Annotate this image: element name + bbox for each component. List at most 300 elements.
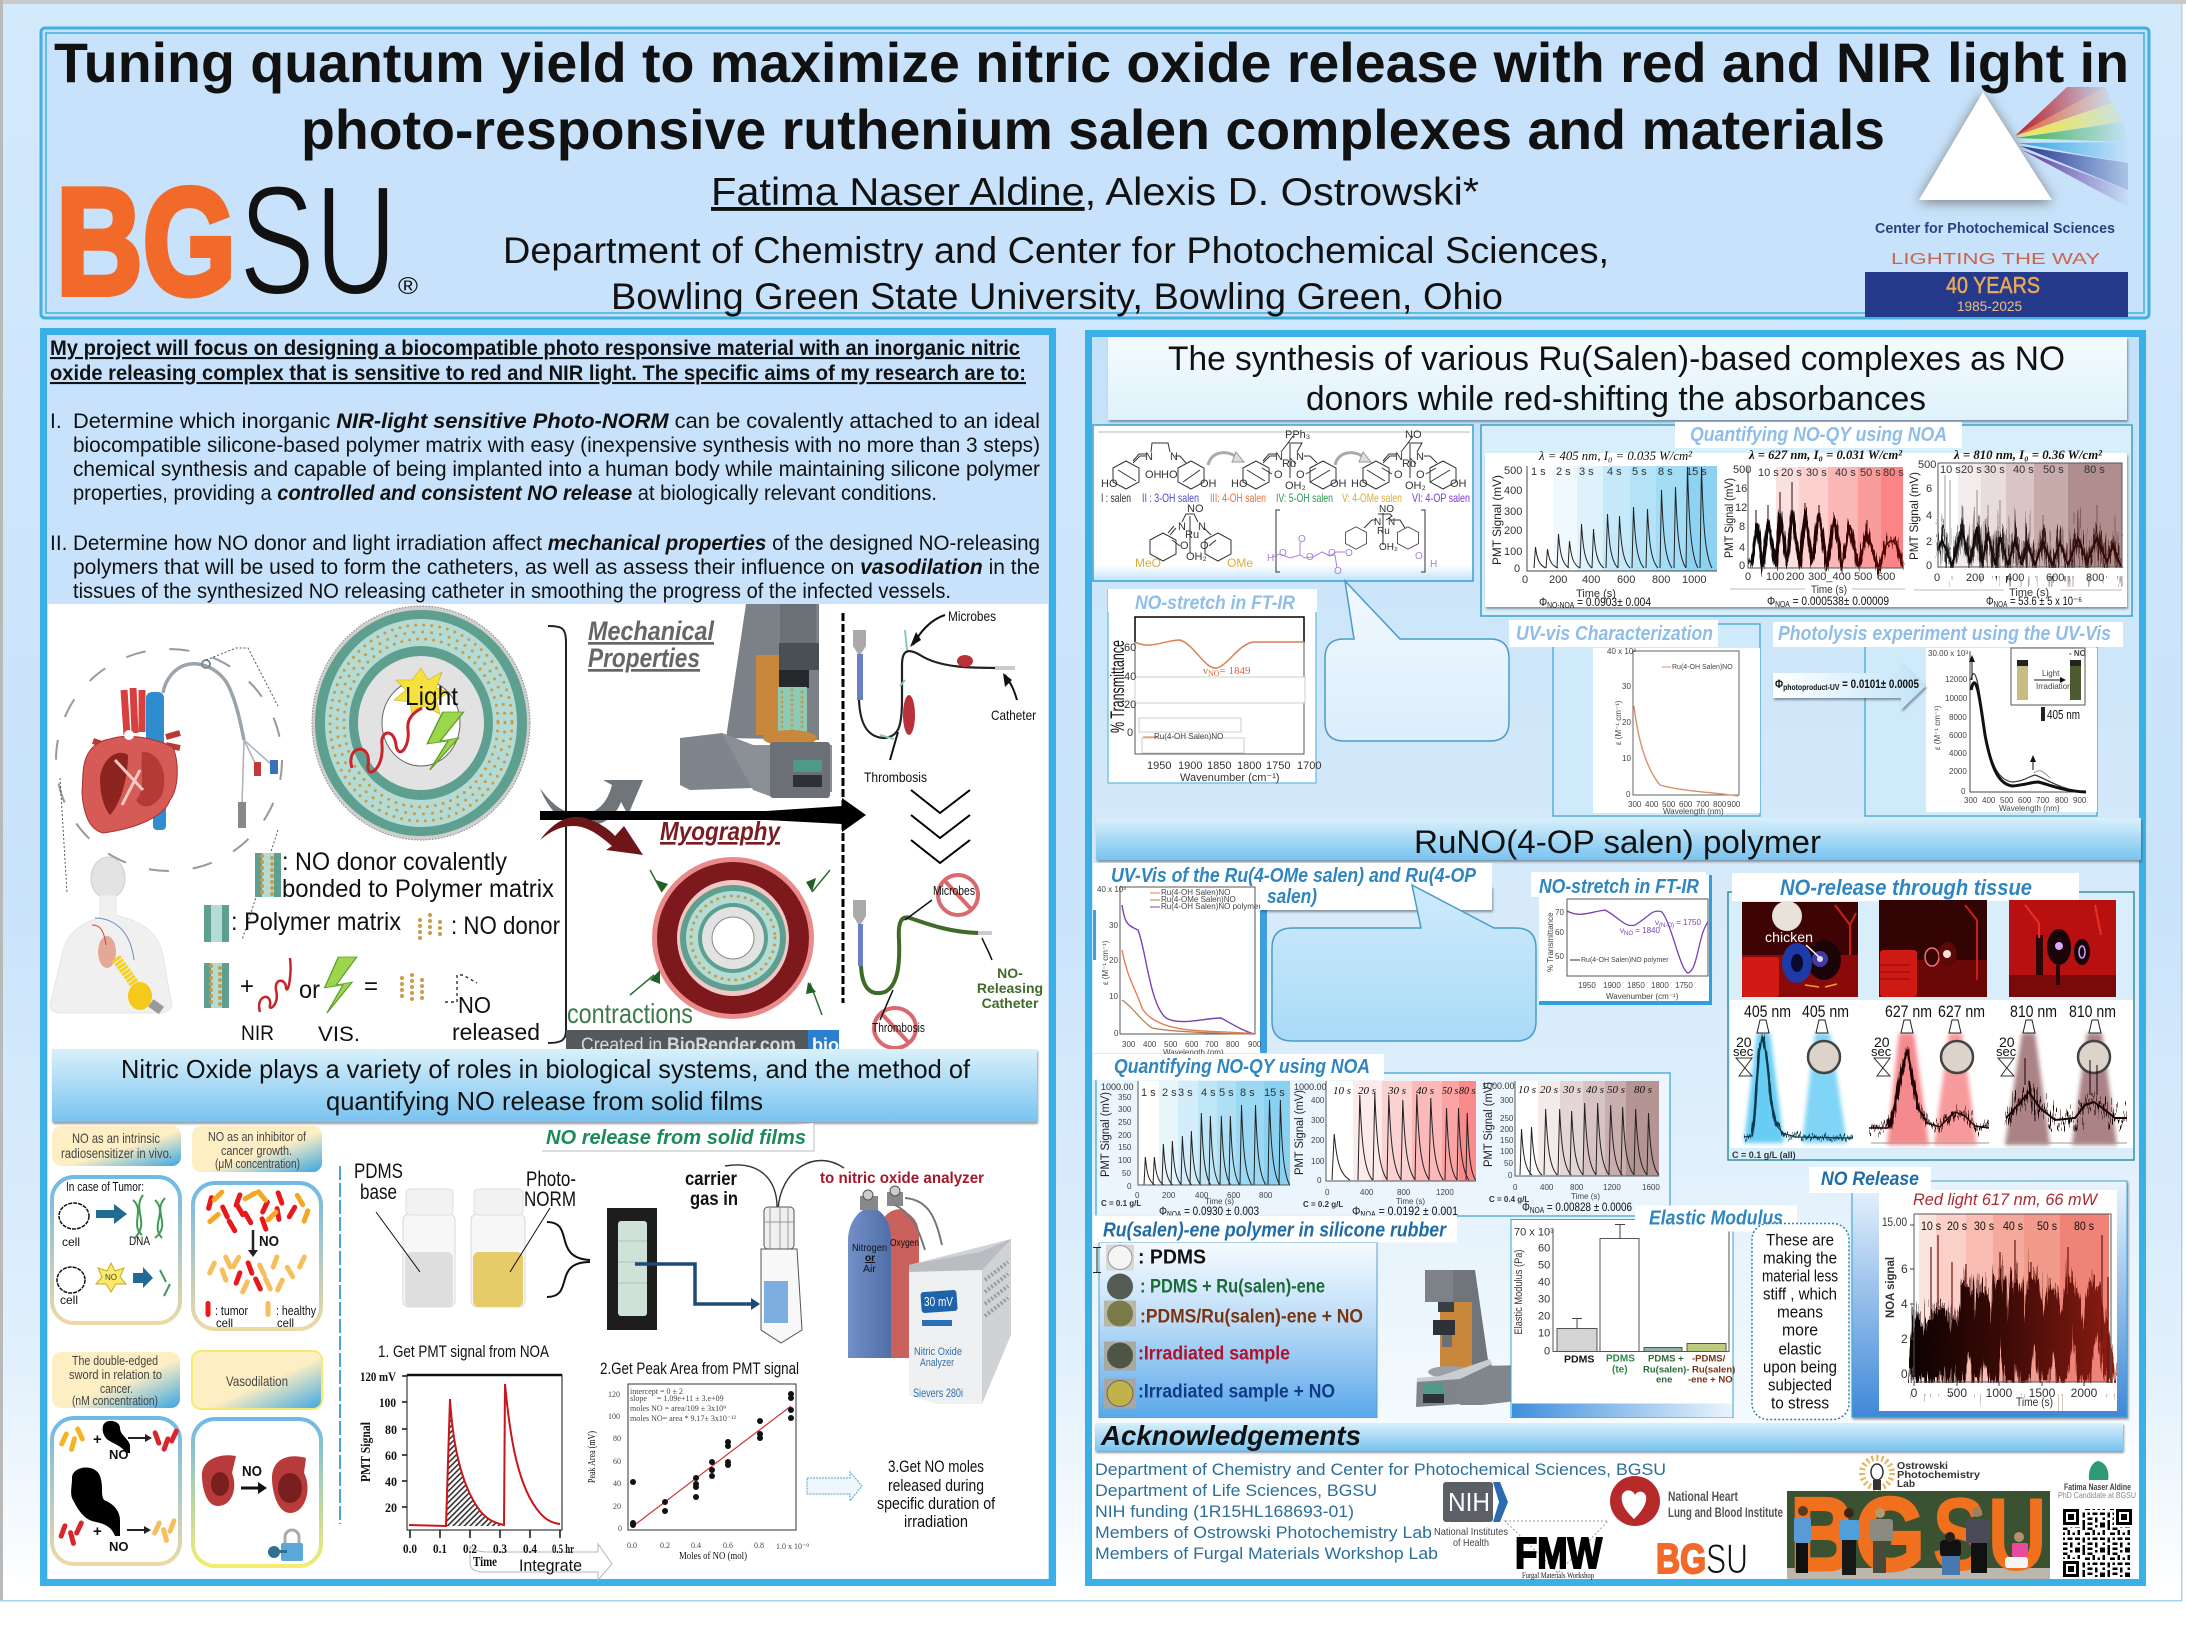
heading: mechanical properties xyxy=(588,616,714,673)
chart: 405 nm: Time (s) xyxy=(1576,588,1616,600)
logo: Ostrowski lab xyxy=(1862,1458,1980,1490)
chart: 810 nm: 0 xyxy=(1934,572,1940,584)
left panel xyxy=(44,332,1052,1582)
panel: UV-vis characterization: 800 xyxy=(1713,800,1727,809)
NO role: inhibitor: (μM concentration) xyxy=(215,1156,300,1171)
chart: 0.2 g/L: 50 s xyxy=(1442,1086,1458,1097)
arrow: to mechanical properties xyxy=(540,780,643,826)
chart: peak area calibration: 0 xyxy=(618,1524,622,1533)
chart: 0.1 g/L: 2 s xyxy=(1162,1087,1177,1099)
labels: salen variants: VI: 4-OP salen xyxy=(1412,491,1470,505)
panel: photolysis: 30.00 x 10³ xyxy=(1928,649,1968,658)
panel: NO-stretch polymer: = 1750 xyxy=(1674,918,1701,927)
chart: 0.2 g/L: 30 s xyxy=(1387,1085,1406,1097)
chart: 0.1 g/L: 100 xyxy=(1118,1156,1132,1165)
text and icon: presenter: PhD Candidate at BGSU xyxy=(2058,1490,2136,1500)
panel: photolysis: Photolysis experiment using the UV-Vis xyxy=(1778,623,2111,645)
equation: NO release xyxy=(204,957,540,1046)
labels: salen variants xyxy=(1101,491,1470,505)
aim II: Determine how NO donor and light irradiation affect mechanical properties of the designed NO-releasing xyxy=(73,532,1040,555)
panel: NO release red light: NO Release xyxy=(1821,1169,1919,1190)
chart: peak area calibration: 60 xyxy=(613,1457,621,1466)
chart: NOA signal: 20 s xyxy=(1947,1219,1967,1233)
chart: 0.1 g/L: 300 xyxy=(1118,1105,1132,1114)
heading: mechanical properties: Properties xyxy=(588,643,700,673)
chart: NOA signal: 50 s xyxy=(2037,1219,2057,1233)
icon: QR code xyxy=(2063,1509,2132,1577)
arrow: to myography xyxy=(540,817,643,855)
chart: bars xyxy=(1513,1224,1735,1386)
chart: 405 nm: 200 xyxy=(1549,574,1567,586)
panel: elastic modulus: Elastic Modulus xyxy=(1649,1208,1783,1230)
panel: UV-vis characterization: 10 xyxy=(1622,754,1631,763)
aim I: Determine which inorganic NIR-light sensitive Photo-NORM can be covalently attached to an ideal xyxy=(73,410,1040,433)
chart: 0.4 g/L: 0 xyxy=(1513,1183,1518,1192)
chart: 0.1 g/L: 0 xyxy=(1135,1191,1140,1200)
BioRender badge xyxy=(566,1030,839,1056)
chart: 627 nm: 0 xyxy=(1745,571,1751,583)
chart: bars: PDMS xyxy=(1606,1354,1635,1364)
chart: PMT signal: Time xyxy=(473,1555,497,1570)
chart: 0.4 g/L: 250 xyxy=(1500,1114,1514,1123)
panel: NO-stretch polymer: 1950 xyxy=(1578,981,1596,990)
banner: polymer xyxy=(1096,818,2141,860)
chart: 0.4 g/L: 40 s xyxy=(1586,1084,1604,1096)
text box: elasticity note: subjected xyxy=(1768,1376,1832,1394)
molecule: polymer complex: O xyxy=(1298,534,1306,545)
chart: peak area calibration: 100 xyxy=(608,1412,620,1421)
chart: 0.1 g/L: 3 s xyxy=(1178,1087,1193,1099)
panel: UV-Vis polymer: 300 xyxy=(1122,1040,1136,1049)
molecule: OMe complex: OMe xyxy=(1227,556,1253,570)
chart: 405 nm: 500 xyxy=(1504,465,1522,477)
panel: silicone rubber samples: :Irradiated sample xyxy=(1138,1344,1290,1364)
chart: 627 nm: 200 xyxy=(1786,571,1804,583)
chart: 810 nm: 500 xyxy=(1918,459,1936,471)
chart: 627 nm: 12 xyxy=(1735,502,1747,514)
molecule: nitrosyl complex: NO xyxy=(1405,429,1422,441)
chart: bars: 0 xyxy=(1544,1346,1550,1358)
arrow: quantum yield: = 0.0101± 0.0005 xyxy=(1839,679,1920,691)
panel: UV-Vis polymer: UV-Vis of the Ru(4-OMe salen) and Ru(4-OP xyxy=(1111,865,1477,887)
panel: UV-Vis polymer: 10 xyxy=(1109,992,1118,1001)
NO role: radiosensitizer: radiosensitizer in vivo. xyxy=(61,1145,172,1161)
BioRender badge: Created in BioRender.com xyxy=(581,1035,796,1056)
chart: PMT signal: 0.3 xyxy=(493,1541,507,1556)
text box: elasticity note: upon being xyxy=(1763,1358,1837,1376)
card: tumor and healthy cells: NO xyxy=(259,1233,279,1250)
affiliation: Bowling Green State University, Bowling Green, Ohio xyxy=(611,276,1503,317)
chart: 0.2 g/L: 1000.00 xyxy=(1294,1082,1327,1092)
icon: rheometer small xyxy=(1416,1270,1525,1407)
equation: NO release: + xyxy=(240,973,254,1000)
chart: PMT signal: 120 mV xyxy=(360,1369,397,1384)
chart: 0.4 g/L: 50 xyxy=(1504,1159,1513,1168)
chart: 0.4 g/L: NOA xyxy=(1530,1206,1545,1215)
panel: photolysis: 6000 xyxy=(1949,731,1967,740)
panel: UV-Vis polymer: 600 xyxy=(1185,1040,1199,1049)
label: to nitric oxide analyzer: to nitric oxide analyzer xyxy=(820,1170,984,1187)
chart: peak area calibration: 0.2 xyxy=(660,1541,670,1550)
chart: PMT signal: 20 xyxy=(385,1500,397,1515)
inset: vial photo: Light xyxy=(2042,669,2060,678)
chart: peak area calibration: 0.6 xyxy=(723,1541,733,1550)
aim I xyxy=(50,410,1040,505)
chart: 405 nm: = 0.0903± 0.004 xyxy=(1574,595,1651,609)
equation: NO release: released xyxy=(452,1019,540,1045)
wavelength labels: sec xyxy=(1733,1044,1754,1059)
chart: 0.2 g/L: Φ xyxy=(1352,1204,1362,1218)
panel: NO-stretch polymer: ν xyxy=(1620,926,1624,935)
chart: bars: Ru(salen)- xyxy=(1643,1364,1689,1376)
chart: 405 nm: 15 s xyxy=(1686,466,1707,478)
labels: salen variants: I : salen xyxy=(1101,491,1131,505)
banner: nitric oxide roles: quantifying NO release from solid films xyxy=(326,1086,763,1116)
chart: 810 nm: 30 s xyxy=(1984,464,2005,476)
chart: 0.2 g/L: 100 xyxy=(1311,1157,1325,1166)
molecule: salen ligand: N xyxy=(1145,451,1153,463)
wavelength labels: 627 nm xyxy=(1938,1002,1985,1021)
molecule: salen ligand: HO xyxy=(1101,478,1118,490)
logo: BGSU small: SU xyxy=(1706,1535,1748,1582)
card: vasodilation xyxy=(193,1419,321,1566)
chart: 810 nm: 600 xyxy=(2046,572,2064,584)
wavelength labels: sec xyxy=(1871,1044,1892,1059)
chart: 0.1 g/L: C = 0.1 g/L xyxy=(1101,1199,1141,1208)
chart: 810 nm: 0 xyxy=(1926,560,1932,572)
chart: 810 nm: 6 xyxy=(1926,483,1932,495)
chart: 0.2 g/L: 20 s xyxy=(1358,1085,1376,1097)
illustration: nitric oxide analyzer: Analyzer xyxy=(920,1357,954,1369)
photo: group at BGSU sign: BG xyxy=(1790,1477,1925,1593)
panel: UV-Vis polymer xyxy=(1093,863,1492,1057)
chart: 405 nm: PMT Signal (mV) xyxy=(1490,475,1504,565)
chart: 810 nm: λ = 810 nm, I₀ = 0.36 W/cm² xyxy=(1953,447,2103,462)
card: double edged effect: + xyxy=(93,1431,102,1448)
chart: peak area calibration: slope = 1.09e+11 ± 3.e+09 xyxy=(630,1394,724,1403)
chart: PMT signal: Integrate xyxy=(519,1556,582,1575)
chart: NOA signal: 500 xyxy=(1947,1386,1967,1400)
divider: dashed xyxy=(842,613,844,1003)
panel: UV-vis characterization: 40 x 10³ xyxy=(1607,647,1636,656)
NO role: double-edged sword: The double-edged xyxy=(72,1353,158,1368)
panel: quantifying NO-QY top: Quantifying NO-QY using NOA xyxy=(1690,424,1947,446)
legend: NO donor and polymer xyxy=(204,848,560,942)
molecule: polymer complex: NO xyxy=(1379,504,1394,515)
labels: salen variants: V: 4-OMe salen xyxy=(1342,491,1402,505)
panel: NO-stretch polymer: 1850 xyxy=(1627,981,1645,990)
callout: structures xyxy=(1325,581,1509,741)
panel: silicone rubber samples: : PDMS xyxy=(1138,1246,1206,1268)
panel: UV-vis characterization: 300 xyxy=(1628,800,1642,809)
panel: UV-vis characterization: Wavelength (nm) xyxy=(1663,807,1724,816)
title: Tuning quantum yield to maximize nitric oxide release with red and NIR light in xyxy=(54,31,2129,94)
chart: 0.1 g/L: 350 xyxy=(1118,1093,1132,1102)
chart: 405 nm: 1 s xyxy=(1531,466,1546,478)
chart: peak area calibration: Moles of NO (mol) xyxy=(679,1551,747,1562)
molecule: polymer complex: OH₂ xyxy=(1379,542,1398,553)
panel: UV-vis characterization: 400 xyxy=(1645,800,1659,809)
chart: 0.1 g/L: Time (s) xyxy=(1205,1197,1234,1206)
card: tumor and healthy cells: : tumor xyxy=(215,1303,249,1318)
illustration: NO releasing catheter: Microbes xyxy=(933,883,975,898)
chart: 405 nm: 0 xyxy=(1522,574,1528,586)
chart: 0.2 g/L: = 0.0192 ± 0.001 xyxy=(1376,1204,1458,1218)
chart: 0.4 g/L: 1600 xyxy=(1642,1183,1660,1192)
equation: NO release: NO xyxy=(458,992,491,1018)
text: acknowledgements: Department of Life Sciences, BGSU xyxy=(1095,1481,1377,1500)
chart: 405 nm: 100 xyxy=(1504,546,1522,558)
equation: NO release: or xyxy=(299,976,320,1004)
illustration: nitric oxide analyzer: 30 mV xyxy=(924,1294,953,1309)
panel: NO-release through tissue xyxy=(1728,873,2134,1160)
illustration: nitric oxide analyzer xyxy=(909,1239,1011,1404)
chart: 0.4 g/L: 1000.00 xyxy=(1482,1081,1515,1091)
molecule: OMe complex: N xyxy=(1178,521,1186,533)
chart: 0.4 g/L: Time (s) xyxy=(1571,1192,1600,1201)
chart: 405 nm xyxy=(1490,448,1717,610)
logo: NHLBI: Lung and Blood Institute xyxy=(1668,1504,1783,1520)
card: tumor cell and DNA: DNA xyxy=(129,1234,150,1248)
molecule: polymer complex: O xyxy=(1334,566,1342,577)
label: carrier gas in: gas in xyxy=(690,1189,738,1210)
banner: synthesis: donors while red-shifting the absorbances xyxy=(1306,380,1926,418)
arrow: film to cuvette xyxy=(635,1264,760,1310)
text: acknowledgements: Department of Chemistry and Center for Photochemical Sciences, BGSU xyxy=(1095,1460,1666,1479)
chart: 405 nm: λ = 405 nm, I₀ = 0.035 W/cm² xyxy=(1538,448,1693,463)
panel: UV-Vis polymer: 30 xyxy=(1109,921,1118,930)
logo: BGSU small xyxy=(1656,1535,1748,1582)
chart: 810 nm: 20 s xyxy=(1961,464,1982,476)
molecule: salen ligand: OH xyxy=(1145,469,1162,481)
wavelength labels: 20 xyxy=(1736,1034,1752,1050)
chart: 627 nm: 100 xyxy=(1766,571,1784,583)
chart: 0.1 g/L: 150 xyxy=(1118,1143,1132,1152)
chart: 0.2 g/L xyxy=(1294,1081,1476,1219)
chart: 0.2 g/L: 200 xyxy=(1311,1136,1325,1145)
chart: 405 nm: Φ xyxy=(1539,595,1549,609)
image: silicone film xyxy=(607,1208,657,1330)
logo: FMW xyxy=(1505,1521,1608,1580)
aim II xyxy=(50,532,1040,603)
heading: myography: Myography xyxy=(660,816,781,846)
chart: 405 nm: 2 s xyxy=(1556,466,1571,478)
chart: 627 nm xyxy=(1722,447,1905,609)
logo: FMW: FMW xyxy=(1515,1529,1602,1578)
beams and spheres xyxy=(1744,1033,2117,1145)
molecule: OMe complex: OH₂ xyxy=(1186,551,1207,563)
chart: 0.1 g/L: 1000.00 xyxy=(1101,1082,1134,1092)
chart: 0.1 g/L: NOA xyxy=(1167,1210,1182,1219)
chart: 0.1 g/L: PMT Signal (mV) xyxy=(1100,1092,1112,1177)
panel: UV-vis characterization: 600 xyxy=(1679,800,1693,809)
chart: NOA signal: 30 s xyxy=(1974,1219,1994,1233)
BGSU logo: BG xyxy=(56,157,236,327)
NO role: radiosensitizer: NO as an intrinsic xyxy=(72,1130,160,1146)
labels: salen variants: IV: 5-OH salen xyxy=(1276,491,1333,505)
chart: peak area calibration: 40 xyxy=(613,1479,621,1488)
text box: elasticity note: These are xyxy=(1766,1230,1834,1250)
chart: 0.2 g/L: 80 s xyxy=(1459,1086,1476,1097)
logo: NIH: NIH xyxy=(1448,1487,1490,1517)
chart: bars: -ene + NO xyxy=(1688,1374,1733,1386)
chart: 0.1 g/L: Φ xyxy=(1159,1204,1169,1218)
chart: 0.1 g/L: 250 xyxy=(1118,1118,1132,1127)
panel: UV-Vis polymer: 400 xyxy=(1143,1040,1157,1049)
chart: 810 nm: 400 xyxy=(2006,572,2024,584)
panel: NO-stretch polymer: NO xyxy=(1624,931,1633,937)
logo: NHLBI xyxy=(1610,1476,1783,1526)
panel: NO-stretch polymer: ν xyxy=(1655,918,1659,927)
labels: salen variants: II : 3-OH salen xyxy=(1142,491,1199,505)
chart: 405 nm: 8 s xyxy=(1658,466,1673,478)
panel: photolysis: 4000 xyxy=(1949,749,1967,758)
equation: NO release: = xyxy=(364,973,378,1000)
text and icon: presenter xyxy=(2058,1461,2136,1500)
card: tumor cell and DNA xyxy=(52,1177,180,1323)
chart: peak area calibration: 1.0 x 10⁻⁹ xyxy=(776,1542,809,1551)
text: step 3 xyxy=(877,1457,995,1531)
NO role: vasodilation: Vasodilation xyxy=(226,1373,288,1389)
chart: NOA signal: 80 s xyxy=(2074,1219,2094,1233)
chart: PMT signal: 0.4 xyxy=(523,1541,537,1556)
chart: NOA signal xyxy=(1882,1214,2117,1409)
BGSU logo xyxy=(56,154,418,328)
text box: elasticity note: material less xyxy=(1762,1266,1838,1286)
card: tumor and healthy cells: cell xyxy=(216,1316,233,1330)
photochemical sciences logo: 40 YEARS xyxy=(1946,272,2040,298)
text: step 3: specific duration of xyxy=(877,1494,995,1513)
logo: Ostrowski lab: Ostrowski xyxy=(1897,1460,1948,1472)
wavelength labels: 405 nm xyxy=(1744,1002,1791,1021)
panel: quantifying NO-QY top xyxy=(1481,422,2132,616)
text: acknowledgements: Members of Ostrowski Photochemistry Lab xyxy=(1095,1523,1432,1542)
chart: PMT signal: 60 xyxy=(385,1448,397,1463)
chart: 0.1 g/L: 1 s xyxy=(1141,1087,1156,1099)
NO role: vasodilation xyxy=(192,1351,322,1409)
card: tumor cell and DNA: NO xyxy=(105,1273,117,1282)
chart: 810 nm: 50 s xyxy=(2043,464,2064,476)
text box: elasticity note xyxy=(1752,1224,1849,1420)
chart: 627 nm: 16 xyxy=(1735,483,1747,495)
chart: 405 nm: NO-NOA xyxy=(1547,601,1575,610)
illustration: nitric oxide analyzer: Nitric Oxide xyxy=(914,1346,962,1358)
chart: 810 nm: 80 s xyxy=(2084,464,2105,476)
illustration: vessel ring xyxy=(630,857,830,1019)
chart: bars: 40 xyxy=(1538,1276,1550,1288)
chart: 810 nm: NOA xyxy=(1994,600,2008,609)
panel: UV-vis characterization: 30 xyxy=(1622,682,1631,691)
illustration: catheter with thrombosis and microbes: Microbes xyxy=(948,608,996,624)
chart: 810 nm: Φ xyxy=(1986,594,1996,608)
right panel xyxy=(1088,334,2142,1593)
NO role: double-edged sword xyxy=(52,1352,180,1408)
panel: NO stretch FT-IR: 0 xyxy=(1127,727,1133,739)
chart: peak area calibration: 0.8 xyxy=(754,1541,764,1550)
wavelength labels: sec xyxy=(1996,1044,2017,1059)
chart: 627 nm: 40 s xyxy=(1835,467,1856,479)
chart: 0.1 g/L: 8 s xyxy=(1240,1087,1255,1099)
aims heading: My project will focus on designing a biocompatible photo responsive material with an inorganic nitric xyxy=(50,337,1020,360)
legend: NO donor and polymer: : NO donor xyxy=(451,912,560,940)
chart: 0.4 g/L: 80 s xyxy=(1634,1084,1652,1096)
panel: UV-Vis polymer: Ru(4-OH Salen)NO xyxy=(1161,888,1230,897)
panel: photolysis: 405 nm xyxy=(2047,707,2080,722)
text: step 3: released during xyxy=(888,1476,984,1495)
chart: 627 nm: 80 s xyxy=(1883,467,1904,479)
chart: peak area calibration: 0.0 xyxy=(627,1541,637,1550)
chart: 810 nm: 40 s xyxy=(2013,464,2034,476)
chart: 0.2 g/L: 10 s xyxy=(1333,1085,1351,1097)
chart: 627 nm: 10 s xyxy=(1758,467,1779,479)
panel: NO-stretch polymer: = 1840 xyxy=(1633,926,1660,935)
chart: 0.4 g/L: 800 xyxy=(1570,1183,1584,1192)
logo: NIH: of Health xyxy=(1453,1537,1489,1549)
molecule: polymer complex xyxy=(1267,504,1437,577)
arrow: quantum yield: Φ xyxy=(1775,679,1784,691)
chart: peak area calibration: moles NO= area * 9.17± 3x10⁻¹² xyxy=(630,1414,737,1423)
affiliation xyxy=(503,230,1609,317)
panel: NO-stretch polymer xyxy=(1531,872,1712,1005)
panel: photolysis: 0 xyxy=(1961,787,1966,796)
chart: peak area calibration: 80 xyxy=(613,1434,621,1443)
panel: silicone rubber samples xyxy=(1093,1216,1457,1418)
panel: photolysis: 8000 xyxy=(1949,713,1967,722)
panel: NO stretch FT-IR: 1850 xyxy=(1207,760,1231,772)
chart: 627 nm: Φ xyxy=(1767,594,1777,608)
panel: photolysis: 800 xyxy=(2055,796,2069,805)
chart: 0.4 g/L: 200 xyxy=(1500,1125,1514,1134)
panel: NO stretch FT-IR xyxy=(1108,589,1321,784)
title: photo-responsive ruthenium salen complexes and materials xyxy=(301,98,1885,161)
arrow: dashed to step 3 xyxy=(807,1472,862,1501)
card: vasodilation: NO xyxy=(242,1463,262,1480)
panel: NO-stretch polymer: 1900 xyxy=(1603,981,1621,990)
molecule: polymer complex: O xyxy=(1328,548,1336,559)
molecule: OMe complex xyxy=(1135,503,1253,570)
panel: UV-Vis polymer: Ru(4-OMe Salen)NO xyxy=(1161,895,1236,904)
panel: UV-vis characterization: 0 xyxy=(1626,790,1631,799)
arrows: synthesis steps xyxy=(1208,452,1371,465)
photo: 810 xyxy=(2009,900,2116,997)
panel: NO stretch FT-IR: 1750 xyxy=(1266,760,1290,772)
chart: 627 nm: 600 xyxy=(1877,571,1895,583)
banner: acknowledgements: Acknowledgements xyxy=(1100,1420,1361,1451)
aims heading xyxy=(50,337,1026,385)
molecule: polymer complex: Ru xyxy=(1377,526,1390,537)
chart: 0.2 g/L: 0 xyxy=(1325,1188,1330,1197)
panel: UV-Vis polymer: 500 xyxy=(1164,1040,1178,1049)
panel: photolysis: 700 xyxy=(2036,796,2050,805)
panel: photolysis: 600 xyxy=(2018,796,2032,805)
chart: 810 nm: = 53.6 ± 5 x 10⁻⁶ xyxy=(2007,594,2082,608)
panel: UV-vis characterization: Ru(4-OH Salen)NO xyxy=(1672,664,1733,671)
panel: UV-Vis polymer: ε (M⁻¹ cm⁻¹) xyxy=(1101,940,1110,985)
panel: photolysis: Wavelength (nm) xyxy=(1999,804,2060,813)
panel: NO-stretch polymer: NO-stretch in FT-IR xyxy=(1539,876,1699,898)
panel: UV-Vis polymer: 800 xyxy=(1226,1040,1240,1049)
chart: peak area calibration: 120 xyxy=(608,1390,620,1399)
banner: synthesis: The synthesis of various Ru(Salen)-based complexes as NO xyxy=(1168,340,2065,378)
photo: 627 xyxy=(1879,900,1987,997)
arrow: quantum yield xyxy=(1773,663,1926,710)
chart: 0.2 g/L: Time (s) xyxy=(1396,1197,1425,1206)
label: carrier gas in xyxy=(685,1169,738,1210)
chart: 627 nm: Time (s) xyxy=(1811,584,1847,596)
panel: NO-stretch polymer: 1750 xyxy=(1675,981,1693,990)
chart: bars: ene xyxy=(1656,1374,1672,1386)
panel: NO stretch FT-IR: Ru(4-OH Salen)NO xyxy=(1154,732,1223,741)
